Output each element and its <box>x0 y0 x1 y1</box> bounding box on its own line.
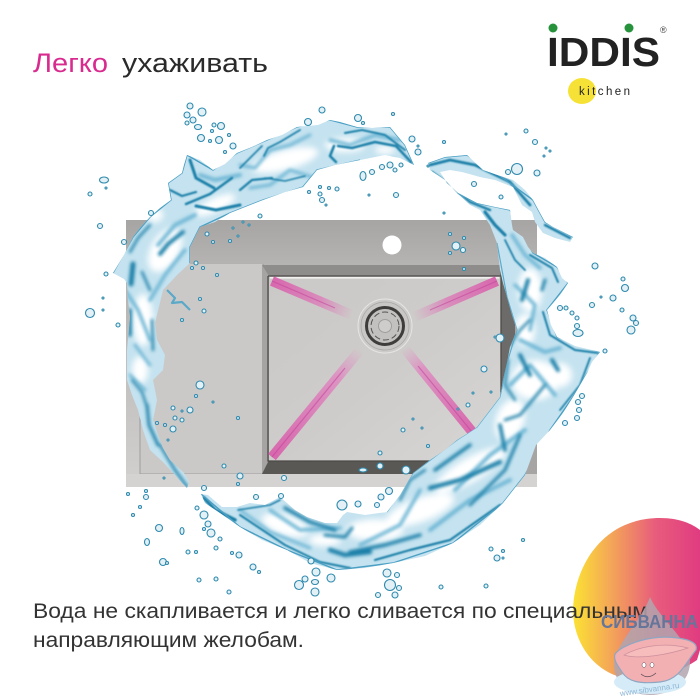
drainboard inset <box>140 264 263 474</box>
watermark: drop <box>614 597 690 695</box>
drain <box>358 299 412 353</box>
logo: kitchen: kitchen <box>579 86 630 98</box>
logo: yellow spot <box>568 78 596 104</box>
watermark: sibvanna <box>601 597 698 698</box>
bowl rim <box>262 265 515 474</box>
watermark: water base <box>614 670 686 694</box>
watermark: url: www.sibvanna.ru <box>618 681 680 698</box>
water splash: right arc and bottom sweep <box>195 150 605 575</box>
right deck strip <box>500 264 537 487</box>
pink drain channels <box>272 281 497 457</box>
water squiggle on drainboard <box>167 290 190 310</box>
water splash: left arc <box>113 120 414 488</box>
water droplets <box>86 103 638 598</box>
logo: green dots <box>548 24 634 32</box>
sink <box>126 220 537 487</box>
bowl floor <box>269 276 501 461</box>
watermark: bath <box>615 637 696 683</box>
logo: registered mark: ® <box>660 25 667 35</box>
decorative gradient blob <box>573 518 700 679</box>
logo: wordmark: IDDIS <box>547 29 660 75</box>
description text: направляющим желобам. <box>33 629 304 652</box>
description text: Вода не скапливается и легко сливается по специальным <box>33 600 648 623</box>
drainboard <box>126 263 263 487</box>
title <box>33 48 268 78</box>
watermark: face <box>641 663 656 677</box>
title: pink word: Легко <box>33 48 108 78</box>
sink top band <box>126 220 537 265</box>
tap hole <box>382 236 402 254</box>
title: dark word: ухаживать <box>122 48 268 78</box>
logo: iddis kitchen <box>547 24 667 104</box>
description text <box>33 600 648 652</box>
